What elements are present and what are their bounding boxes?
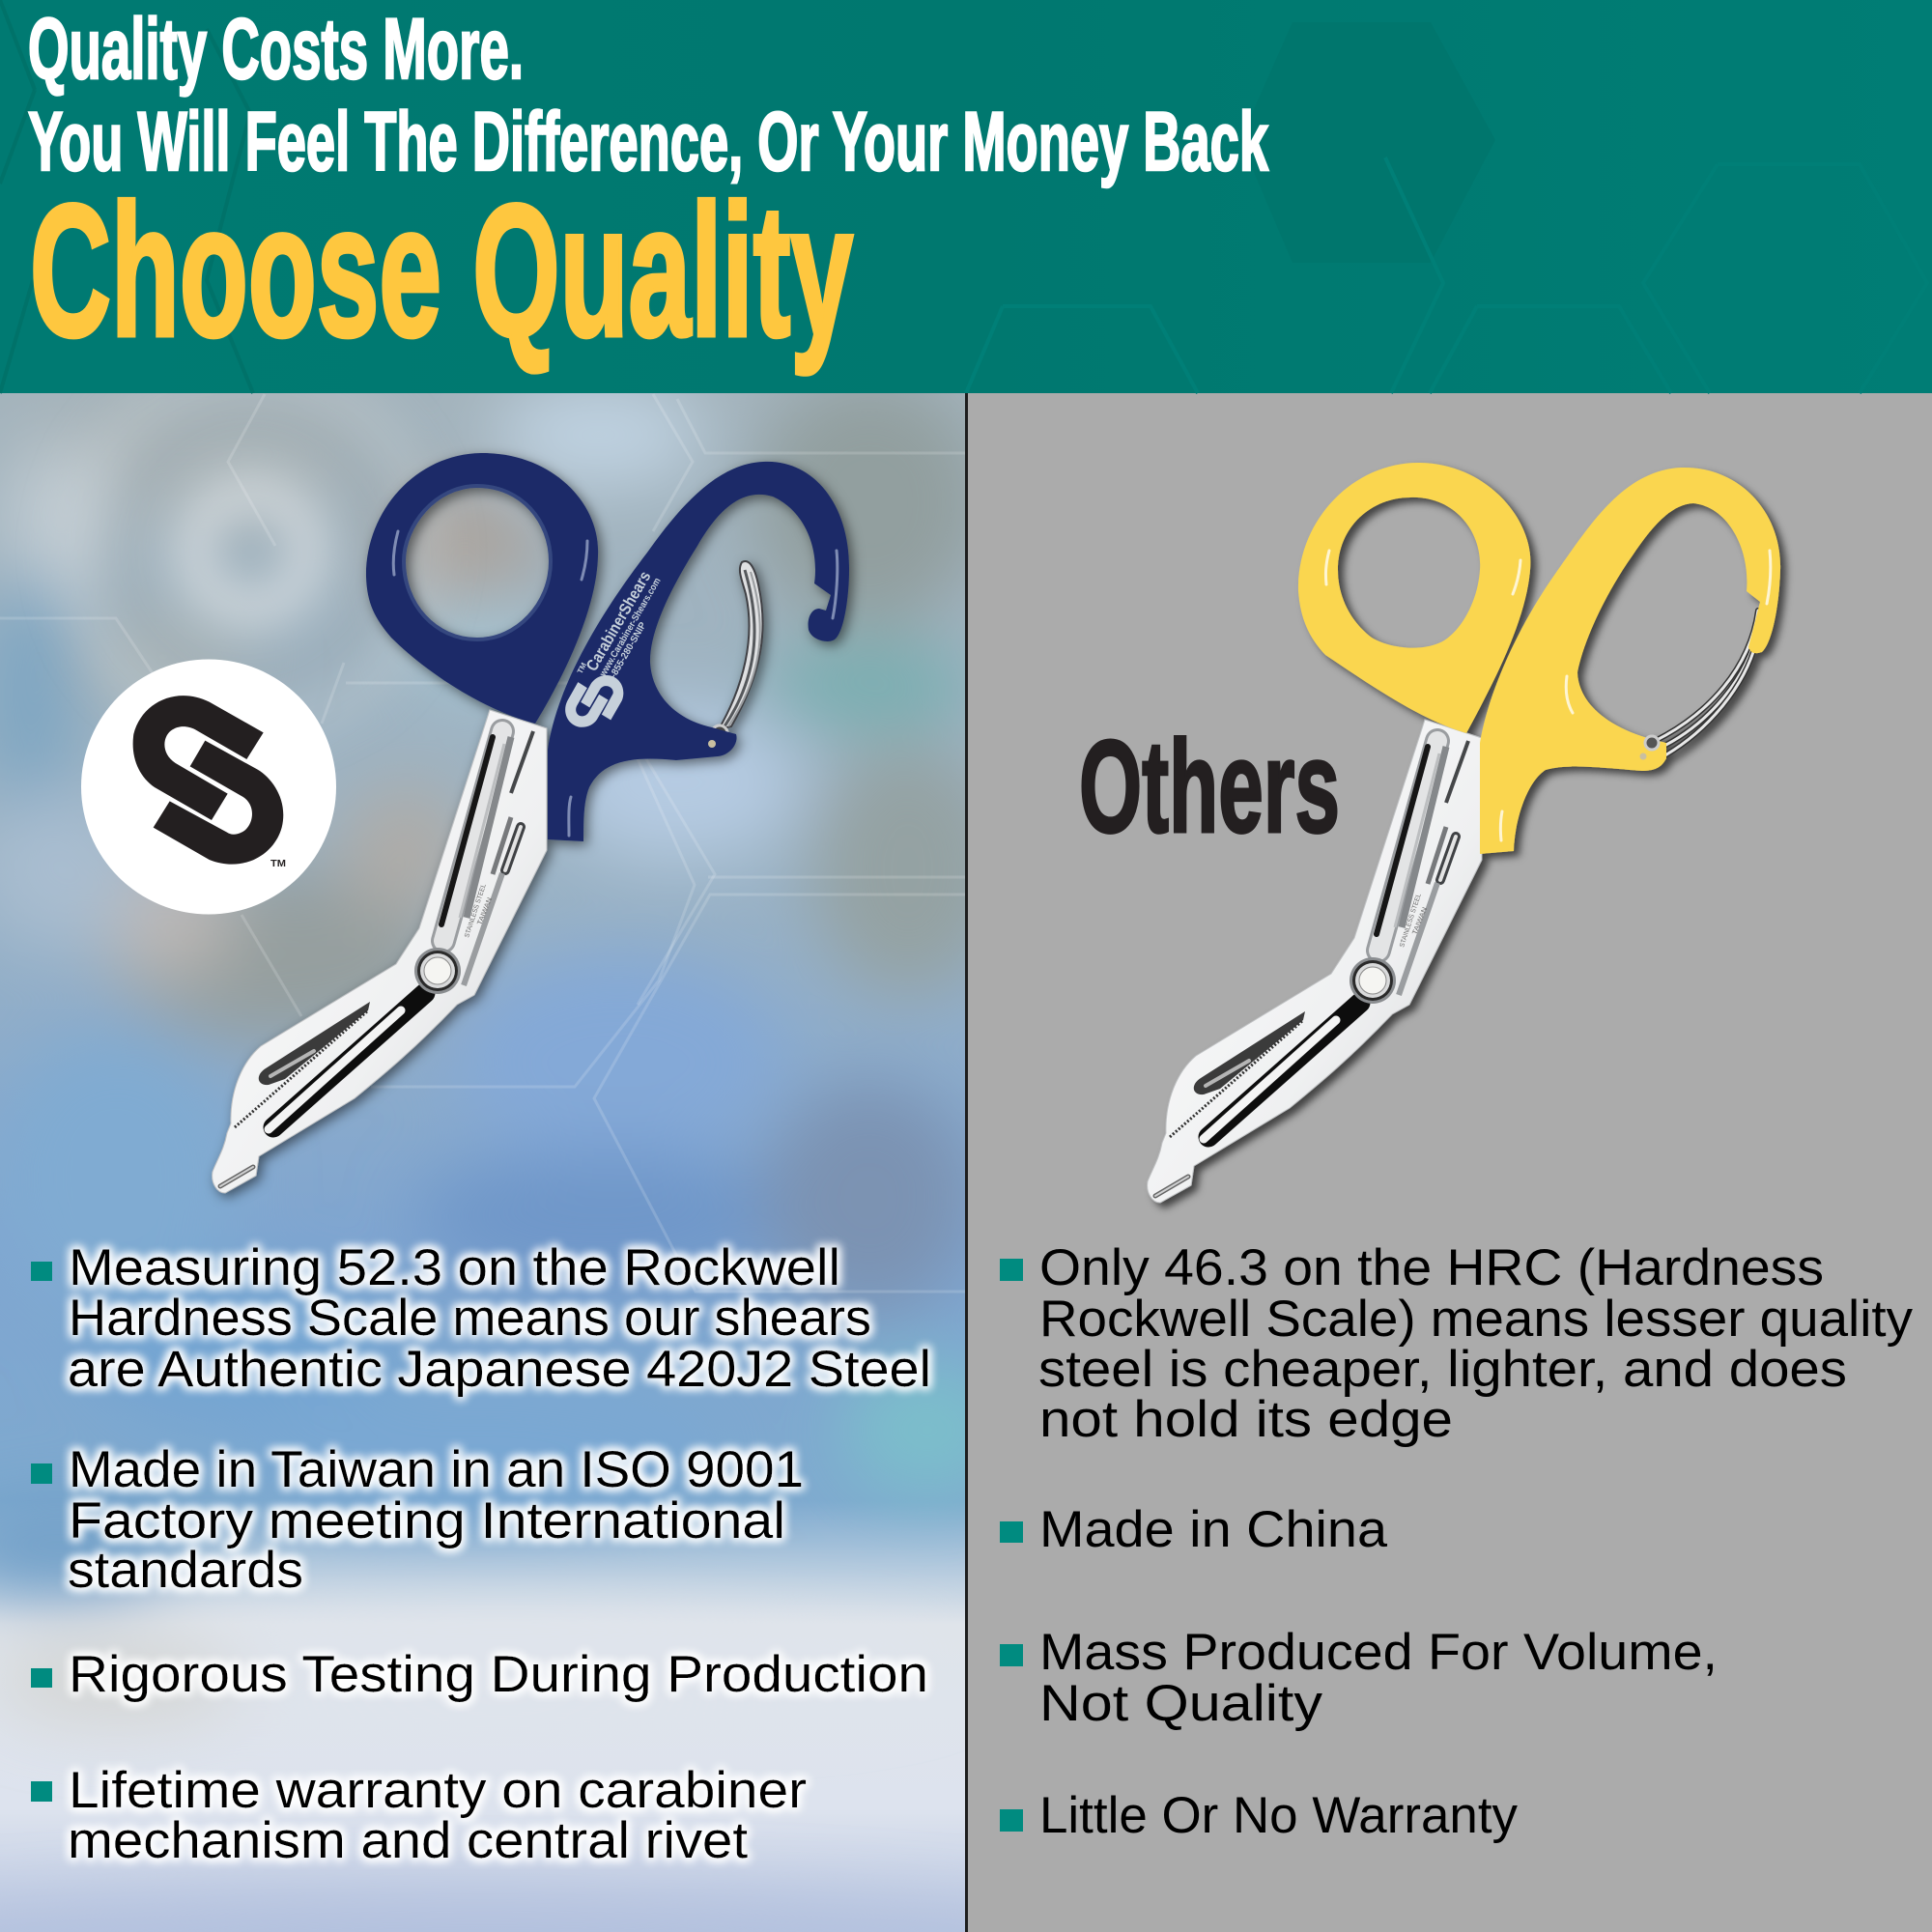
drawback: volume: [1039, 1624, 1718, 1732]
benefit: warranty: mechanism and central rivet: [68, 1812, 748, 1869]
rivet: [414, 948, 461, 994]
benefit: origin: standards: [68, 1542, 303, 1599]
carabiner gate: [712, 561, 763, 741]
heading: choose quality: Choose Quality: [30, 166, 853, 376]
rivet: [1350, 957, 1396, 1004]
benefit: origin: Factory meeting International: [69, 1492, 785, 1549]
stamped blade text: STAINLESS STEEL: [464, 883, 488, 939]
steel blades: [1148, 720, 1482, 1203]
handle phone: 1-855-280-SNIP: [606, 620, 649, 684]
vertical divider: [965, 393, 968, 1932]
benefit: hardness: Measuring 52.3 on the Rockwell: [69, 1239, 840, 1296]
heading: quality costs more: Quality Costs More.: [28, 0, 524, 97]
steel blades: [213, 710, 547, 1193]
benefit: testing: Rigorous Testing During Production: [69, 1646, 928, 1703]
right column: drawbacks list: [1000, 1239, 1914, 1844]
benefit: warranty: Lifetime warranty on carabiner: [69, 1762, 807, 1819]
yellow handle highlights: [1325, 551, 1771, 840]
bullet marks: [1000, 1259, 1023, 1832]
handle pin: [708, 740, 716, 748]
benefit: hardness: [68, 1239, 931, 1398]
header band: [0, 0, 1932, 393]
stamped blade text: STAINLESS STEEL: [1399, 893, 1423, 949]
handle pin: [1640, 736, 1659, 759]
benefit: origin: [68, 1441, 804, 1599]
drawback: hardness: Only 46.3 on the HRC (Hardness: [1039, 1239, 1824, 1296]
drawback: hardness: Rockwell Scale) means lesser quality: [1039, 1291, 1914, 1348]
carabiner gate wires: [1651, 611, 1758, 756]
stamped origin text: TAIWAN: [1411, 906, 1429, 936]
yellow handle with carabiner: [1480, 468, 1780, 854]
benefit: hardness: are Authentic Japanese 420J2 Steel: [68, 1341, 931, 1398]
bullet marks: [31, 1262, 52, 1802]
logo badge: [81, 659, 336, 914]
drawback: volume: Mass Produced For Volume,: [1039, 1624, 1718, 1681]
blue handle with carabiner: [548, 462, 849, 841]
blue carabiner shears: [213, 453, 849, 1193]
drawback: hardness: steel is cheaper, lighter, and does: [1038, 1341, 1847, 1398]
icon: interlocked S logo: [133, 696, 283, 865]
handle logo: [565, 675, 623, 727]
other brand shears: [1148, 463, 1780, 1203]
left panel blurred photo background: [0, 393, 965, 1932]
drawback: hardness: not hold its edge: [1039, 1391, 1453, 1448]
handle website: www.Carabiner-Shears.com: [598, 576, 664, 679]
drawback: volume: Not Quality: [1039, 1675, 1323, 1732]
benefit: hardness: Hardness Scale means our shears: [69, 1290, 871, 1347]
left column: benefits list: [31, 1239, 931, 1869]
benefit: warranty: [68, 1762, 807, 1869]
benefit: origin: Made in Taiwan in an ISO 9001: [69, 1441, 804, 1498]
others label: Others: [1079, 713, 1340, 860]
yellow thumb ring: [1298, 463, 1530, 733]
handle highlights: [393, 531, 838, 836]
drawback: origin: Made in China: [1039, 1501, 1388, 1558]
blue thumb ring: [366, 453, 598, 724]
handle TM: TM: [576, 661, 588, 675]
trademark mark: TM: [270, 859, 286, 869]
right panel background: [966, 393, 1932, 1932]
stamped origin text: TAIWAN: [476, 896, 494, 926]
drawback: hardness: [1038, 1239, 1914, 1448]
handle brand name: CarabinerShears: [582, 568, 654, 674]
ring bevel: [404, 486, 551, 639]
drawback: warranty: Little Or No Warranty: [1039, 1787, 1518, 1844]
